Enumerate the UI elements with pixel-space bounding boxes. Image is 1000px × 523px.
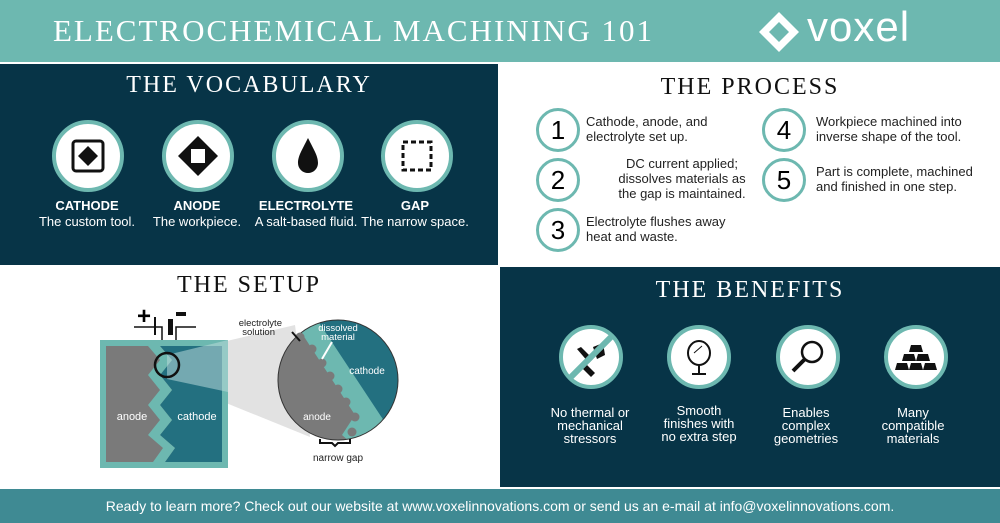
- step 2: the gap is maintained.: [618, 186, 746, 201]
- step 4: 4: [777, 115, 791, 145]
- setup diagram: electrolyte: [239, 318, 282, 329]
- text: benefit labels: No thermal or: [551, 405, 629, 420]
- setup diagram: narrow gap: [313, 453, 363, 464]
- step 2: dissolves materials as: [618, 171, 746, 186]
- setup diagram: [100, 303, 398, 468]
- icon: gap: [381, 120, 453, 192]
- step 1: 1: [551, 115, 565, 145]
- heading: the setup: THE SETUP: [177, 272, 321, 298]
- heading: the process: THE PROCESS: [661, 74, 839, 100]
- heading: the vocabulary: THE VOCABULARY: [126, 72, 372, 98]
- step 2: DC current applied;: [626, 156, 738, 171]
- panel: benefits: materials: [887, 431, 939, 446]
- step 5: [762, 158, 973, 202]
- footer: Ready to learn more? Check out our website at www.voxelinnovations.com or send us an e-mail at info@voxelinnovations.com.: [106, 498, 894, 514]
- step 5: Part is complete, machined: [816, 164, 973, 179]
- panel: benefits: finishes with: [664, 416, 734, 431]
- heading: the benefits: THE BENEFITS: [656, 277, 844, 303]
- panel: vocabulary: GAP: [401, 198, 429, 213]
- panel: vocabulary: ELECTROLYTE: [259, 198, 353, 213]
- text: benefit labels: mechanical: [557, 418, 623, 433]
- panel: benefits: geometries: [774, 431, 838, 446]
- step 3: heat and waste.: [586, 229, 678, 244]
- setup diagram: material: [321, 332, 355, 343]
- step 1: electrolyte set up.: [586, 129, 688, 144]
- footer: [0, 489, 1000, 523]
- step 2: 2: [551, 165, 565, 195]
- step 4: inverse shape of the tool.: [816, 129, 961, 144]
- panel: vocabulary: The workpiece.: [153, 214, 241, 229]
- step 3: [536, 208, 726, 252]
- step 3: 3: [551, 215, 565, 245]
- icon: mirror: [667, 325, 731, 389]
- icon: anode: [162, 120, 234, 192]
- panel: setup: [100, 276, 398, 468]
- panel: benefits: [500, 267, 1000, 487]
- logo: voxel: [807, 3, 910, 50]
- panel: vocabulary: The narrow space.: [361, 214, 469, 229]
- step 2: [536, 156, 746, 202]
- setup diagram: dissolved: [318, 323, 358, 334]
- panel: benefits: compatible: [882, 418, 944, 433]
- step 4: [762, 108, 962, 152]
- step 3: Electrolyte flushes away: [586, 214, 725, 229]
- logo: [759, 3, 910, 52]
- panel: benefits: Enables: [782, 405, 829, 420]
- header bar: [0, 0, 1000, 62]
- text: vocab labels: CATHODE: [55, 198, 119, 213]
- setup diagram: cathode: [349, 366, 385, 377]
- step 4: Workpiece machined into: [816, 114, 962, 129]
- title: ELECTROCHEMICAL MACHINING 101: [53, 13, 654, 48]
- icon: no stress: [559, 325, 623, 389]
- panel: process: [500, 64, 1000, 265]
- step 1: [536, 108, 707, 152]
- step 5: and finished in one step.: [816, 179, 957, 194]
- setup diagram: anode: [303, 412, 331, 423]
- setup diagram: +: [137, 303, 151, 330]
- panel: benefits: complex: [782, 418, 830, 433]
- icon: magnifier: [776, 325, 840, 389]
- setup diagram: anode: [117, 411, 147, 423]
- panel: benefits: Many: [897, 405, 929, 420]
- step 5: 5: [777, 165, 791, 195]
- text: benefit labels: stressors: [564, 431, 616, 446]
- text: vocab labels: The custom tool.: [39, 214, 135, 229]
- panel: benefits: no extra step: [661, 429, 737, 444]
- panel: vocabulary: ANODE: [174, 198, 220, 213]
- icon: electrolyte: [272, 120, 344, 192]
- panel: vocabulary: [0, 64, 498, 265]
- panel: benefits: Smooth: [677, 403, 721, 418]
- setup diagram: solution: [242, 327, 275, 338]
- step 1: Cathode, anode, and: [586, 114, 707, 129]
- text: vocab labels: [39, 198, 135, 229]
- setup diagram: cathode: [177, 411, 217, 423]
- text: benefit labels: [551, 405, 630, 446]
- panel: vocabulary: A salt-based fluid.: [255, 214, 357, 229]
- icon: bars: [884, 325, 948, 389]
- icon: cathode: [52, 120, 124, 192]
